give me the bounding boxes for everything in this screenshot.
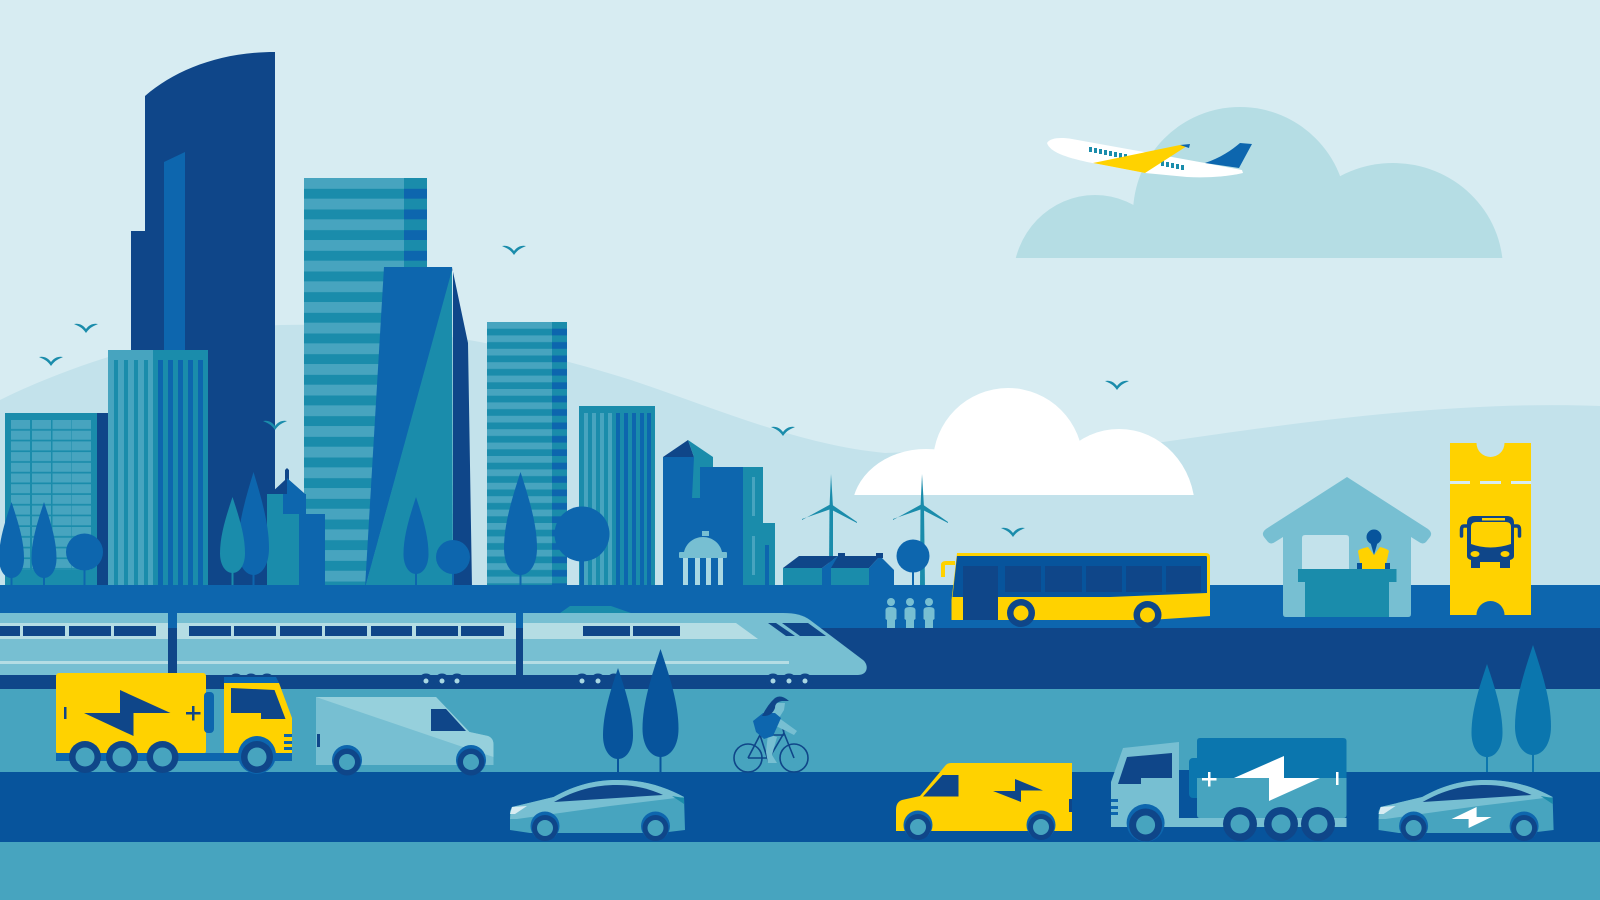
foreground verge	[0, 842, 1600, 900]
verge trees right	[1472, 645, 1551, 772]
electric bolt	[1452, 807, 1492, 828]
high-speed train	[0, 606, 867, 688]
bus windows and door	[963, 566, 1201, 620]
lower verge	[0, 689, 1600, 772]
small stepped building	[267, 468, 325, 588]
yellow van wheels	[904, 810, 1056, 840]
cyclist	[734, 697, 808, 772]
peaked blue building	[663, 440, 775, 588]
vertical striped tower	[108, 350, 208, 588]
navy curved skyscraper	[131, 52, 275, 590]
crystal tower	[365, 267, 472, 588]
road	[0, 772, 1600, 842]
teal electric truck	[1111, 738, 1346, 842]
houses	[783, 553, 894, 588]
glass office block left	[5, 413, 109, 588]
sedan wheels	[530, 812, 670, 841]
wind turbines	[802, 474, 948, 588]
bird over tower	[263, 421, 287, 430]
ground band	[0, 585, 1600, 628]
rail embankment	[0, 628, 1600, 689]
truck wheels	[69, 736, 276, 774]
teal truck wheels	[1127, 804, 1335, 842]
horizontal striped tower	[304, 178, 427, 588]
train car gaps	[168, 613, 523, 675]
train windows	[0, 623, 826, 636]
birds	[39, 246, 1129, 537]
mid striped tower	[487, 322, 567, 588]
yellow ticket with bus icon	[1450, 443, 1531, 615]
distant hills	[0, 325, 1600, 590]
white bolt	[1234, 756, 1320, 801]
icon: bus	[1462, 516, 1520, 568]
booth screen	[1302, 535, 1349, 569]
street trees	[0, 472, 930, 588]
yellow electric bus	[943, 553, 1210, 629]
train bogies	[228, 674, 812, 688]
large pale cloud	[1016, 107, 1502, 258]
ticket booth	[1263, 477, 1431, 617]
verge trees centre	[603, 649, 678, 772]
rider	[765, 703, 797, 735]
narrow ribbed tower	[579, 406, 655, 588]
pale delivery van	[316, 697, 494, 776]
yellow electric van	[896, 763, 1072, 840]
booth desk	[1298, 569, 1396, 617]
electric sedan wheels	[1399, 812, 1539, 841]
airplane	[1047, 138, 1252, 177]
electric sedan	[1379, 780, 1554, 841]
domed civic building	[679, 531, 727, 588]
battery bolt	[84, 690, 170, 736]
van wheels	[332, 745, 486, 776]
bus wheels	[1007, 599, 1162, 629]
skyline	[0, 52, 948, 590]
white cloud	[854, 388, 1194, 495]
waiting passengers	[886, 598, 934, 628]
yellow electric truck	[56, 673, 292, 774]
bicycle	[734, 729, 808, 772]
blue sedan	[510, 780, 685, 841]
booth attendant	[1357, 530, 1390, 569]
